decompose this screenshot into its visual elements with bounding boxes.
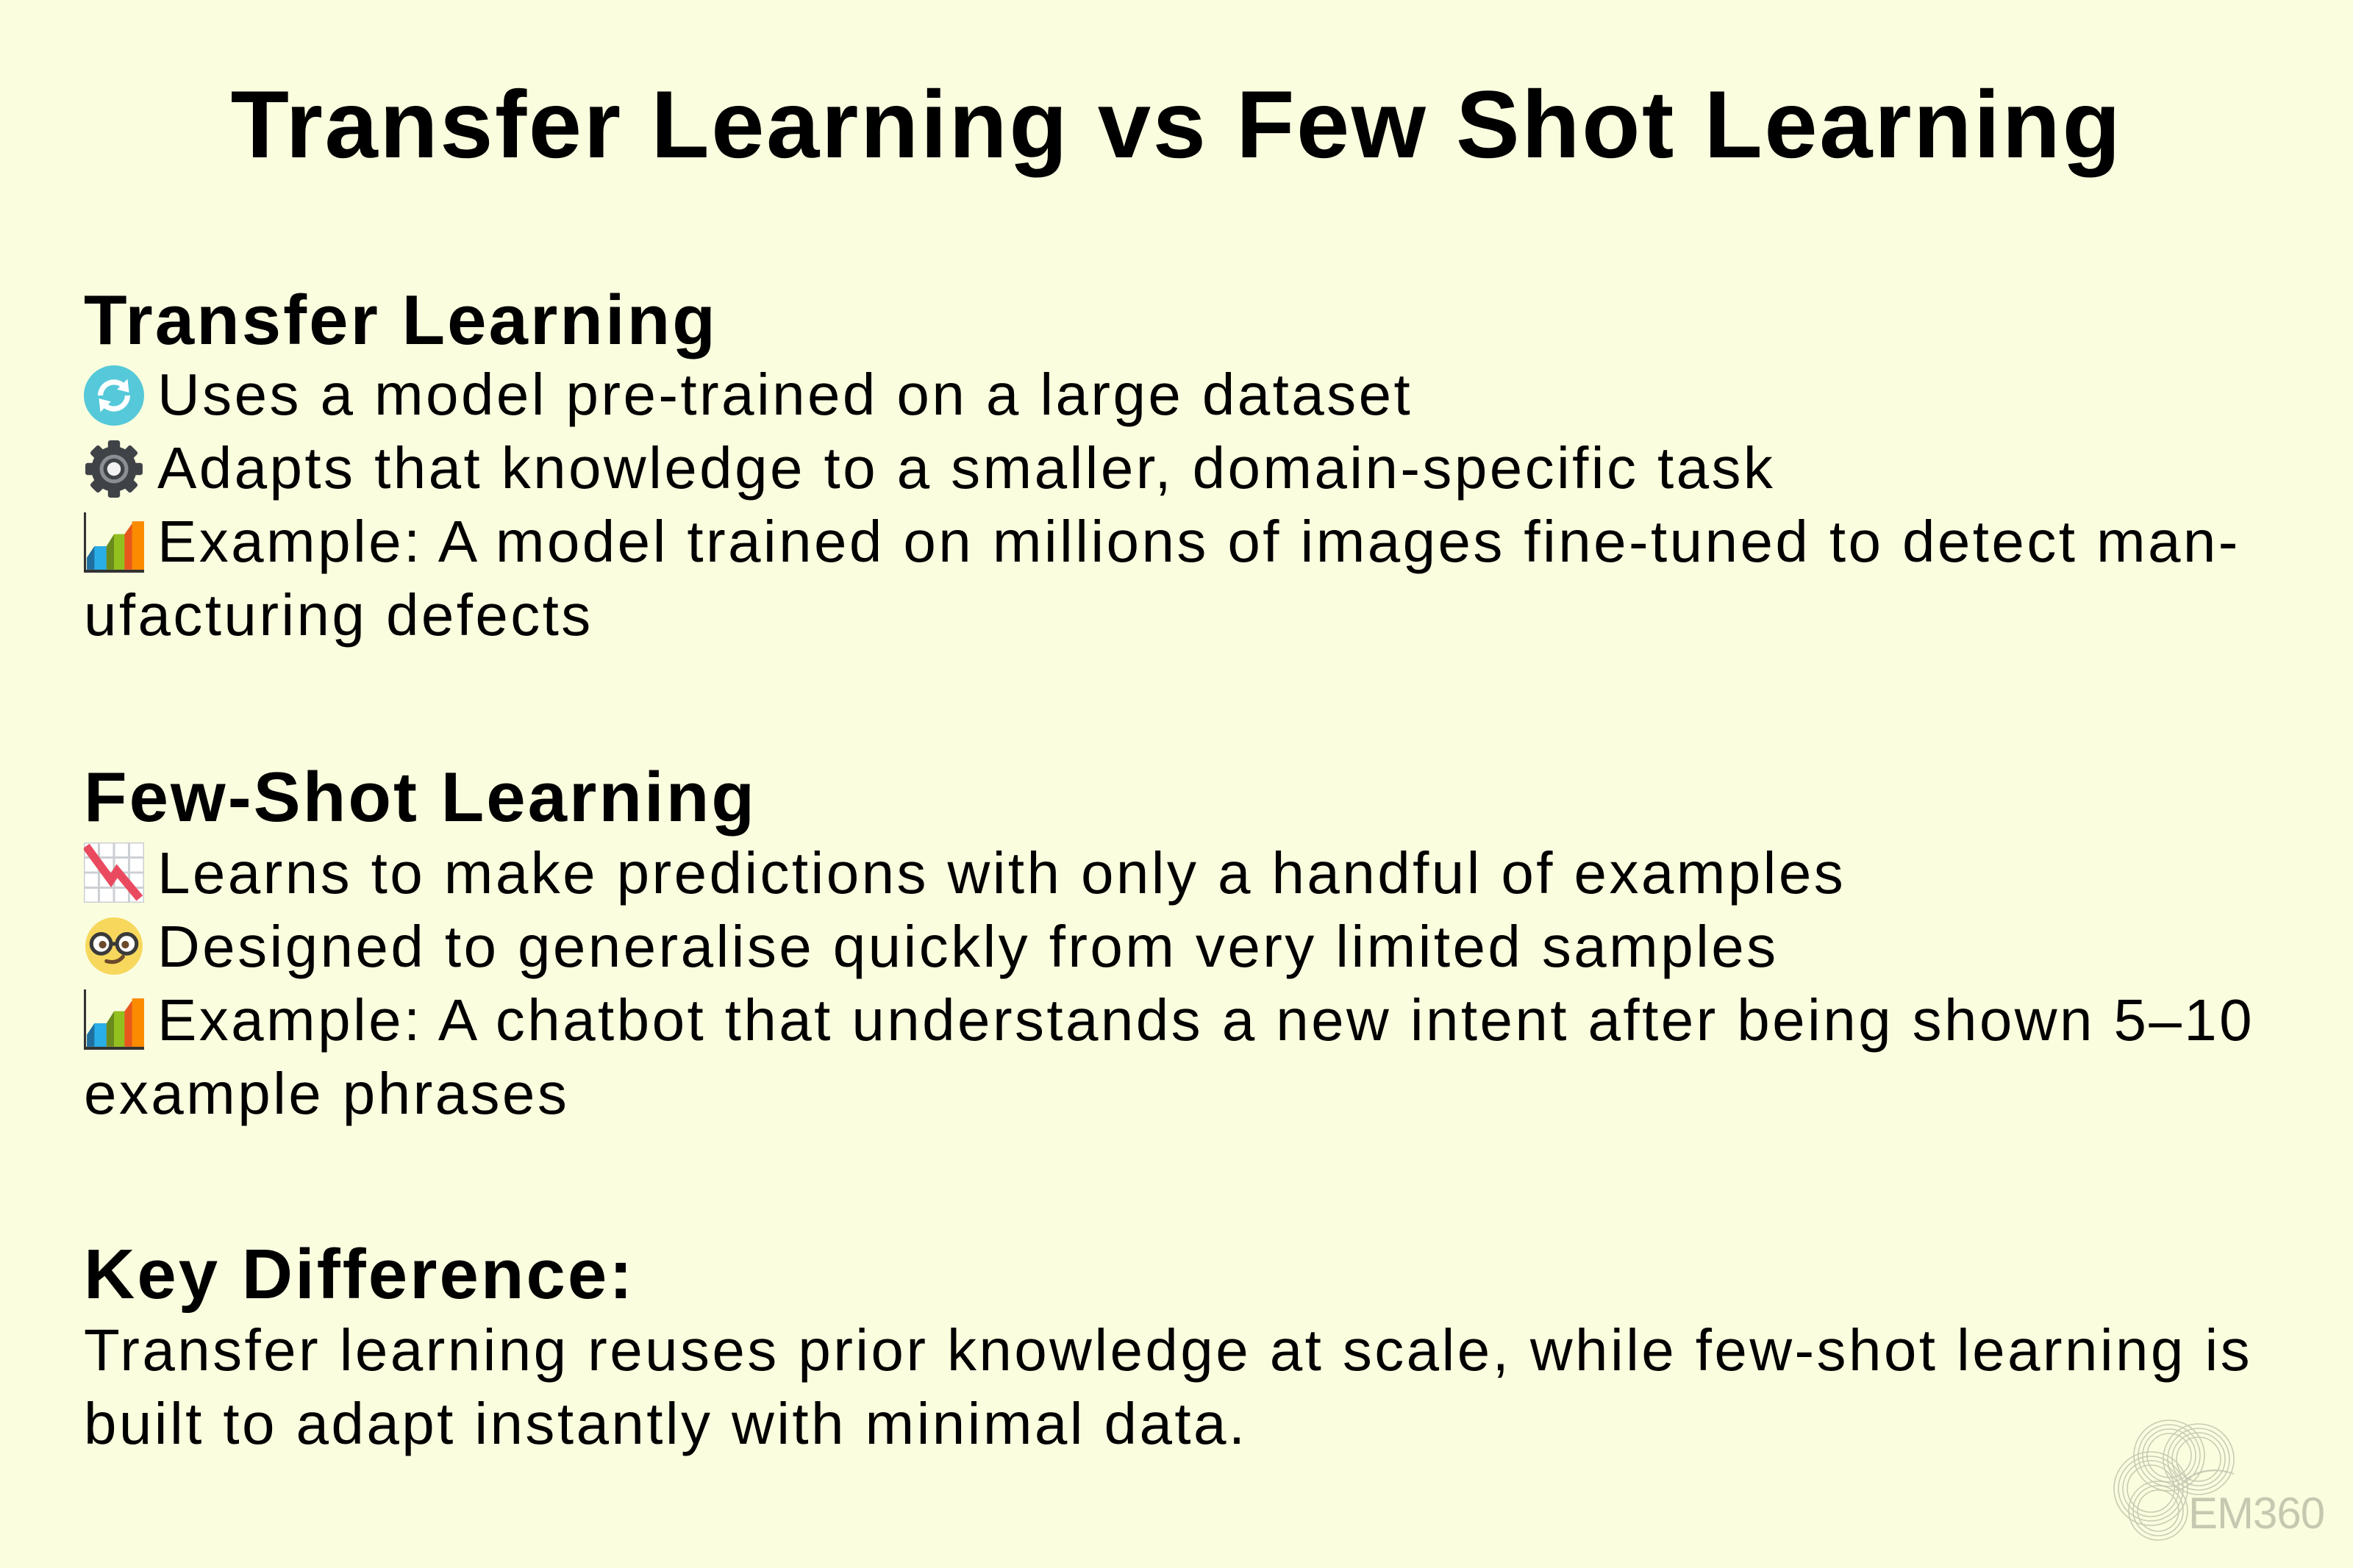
heading: transfer learning: Transfer Learning — [84, 281, 718, 359]
text: line 3: Example: A chatbot that understands a new intent after being shown 5–10 — [157, 987, 2254, 1053]
icon: chart decreasing — [84, 842, 144, 903]
logo text: EM360 — [2188, 1489, 2324, 1538]
text: key difference body: built to adapt instantly with minimal data. — [84, 1391, 1247, 1456]
panel: transfer learning — [84, 281, 2240, 648]
text: key difference body — [84, 1317, 2252, 1456]
logo mark — [2113, 1420, 2235, 1541]
text: line 2: Adapts that knowledge to a smaller, domain-specific task — [157, 435, 1775, 501]
text: line 4: example phrases — [84, 1061, 569, 1126]
heading: key difference: Key Difference: — [84, 1235, 635, 1314]
text: line 1: Learns to make predictions with only a handful of examples — [157, 840, 1846, 906]
panel: few-shot learning — [84, 758, 2254, 1126]
text: line 4: ufacturing defects — [84, 582, 593, 648]
heading: few-shot learning: Few-Shot Learning — [84, 758, 757, 837]
text: line 3: Example: A model trained on millions of images fine-tuned to detect man- — [157, 509, 2240, 574]
panel: key difference — [84, 1235, 2252, 1456]
icon: refresh — [84, 365, 144, 426]
text: key difference body: Transfer learning reuses prior knowledge at scale, while few-shot learning is — [84, 1317, 2252, 1383]
text: line 1: Uses a model pre-trained on a large dataset — [157, 362, 1413, 427]
title: Transfer Learning vs Few Shot Learning — [231, 71, 2122, 178]
text: line 2: Designed to generalise quickly from very limited samples — [157, 914, 1779, 979]
icon: bar chart — [84, 989, 144, 1050]
icon: bar chart — [84, 512, 144, 573]
icon: gear — [85, 440, 143, 498]
logo: EM360 — [2113, 1420, 2324, 1541]
icon: nerd face — [85, 917, 143, 975]
